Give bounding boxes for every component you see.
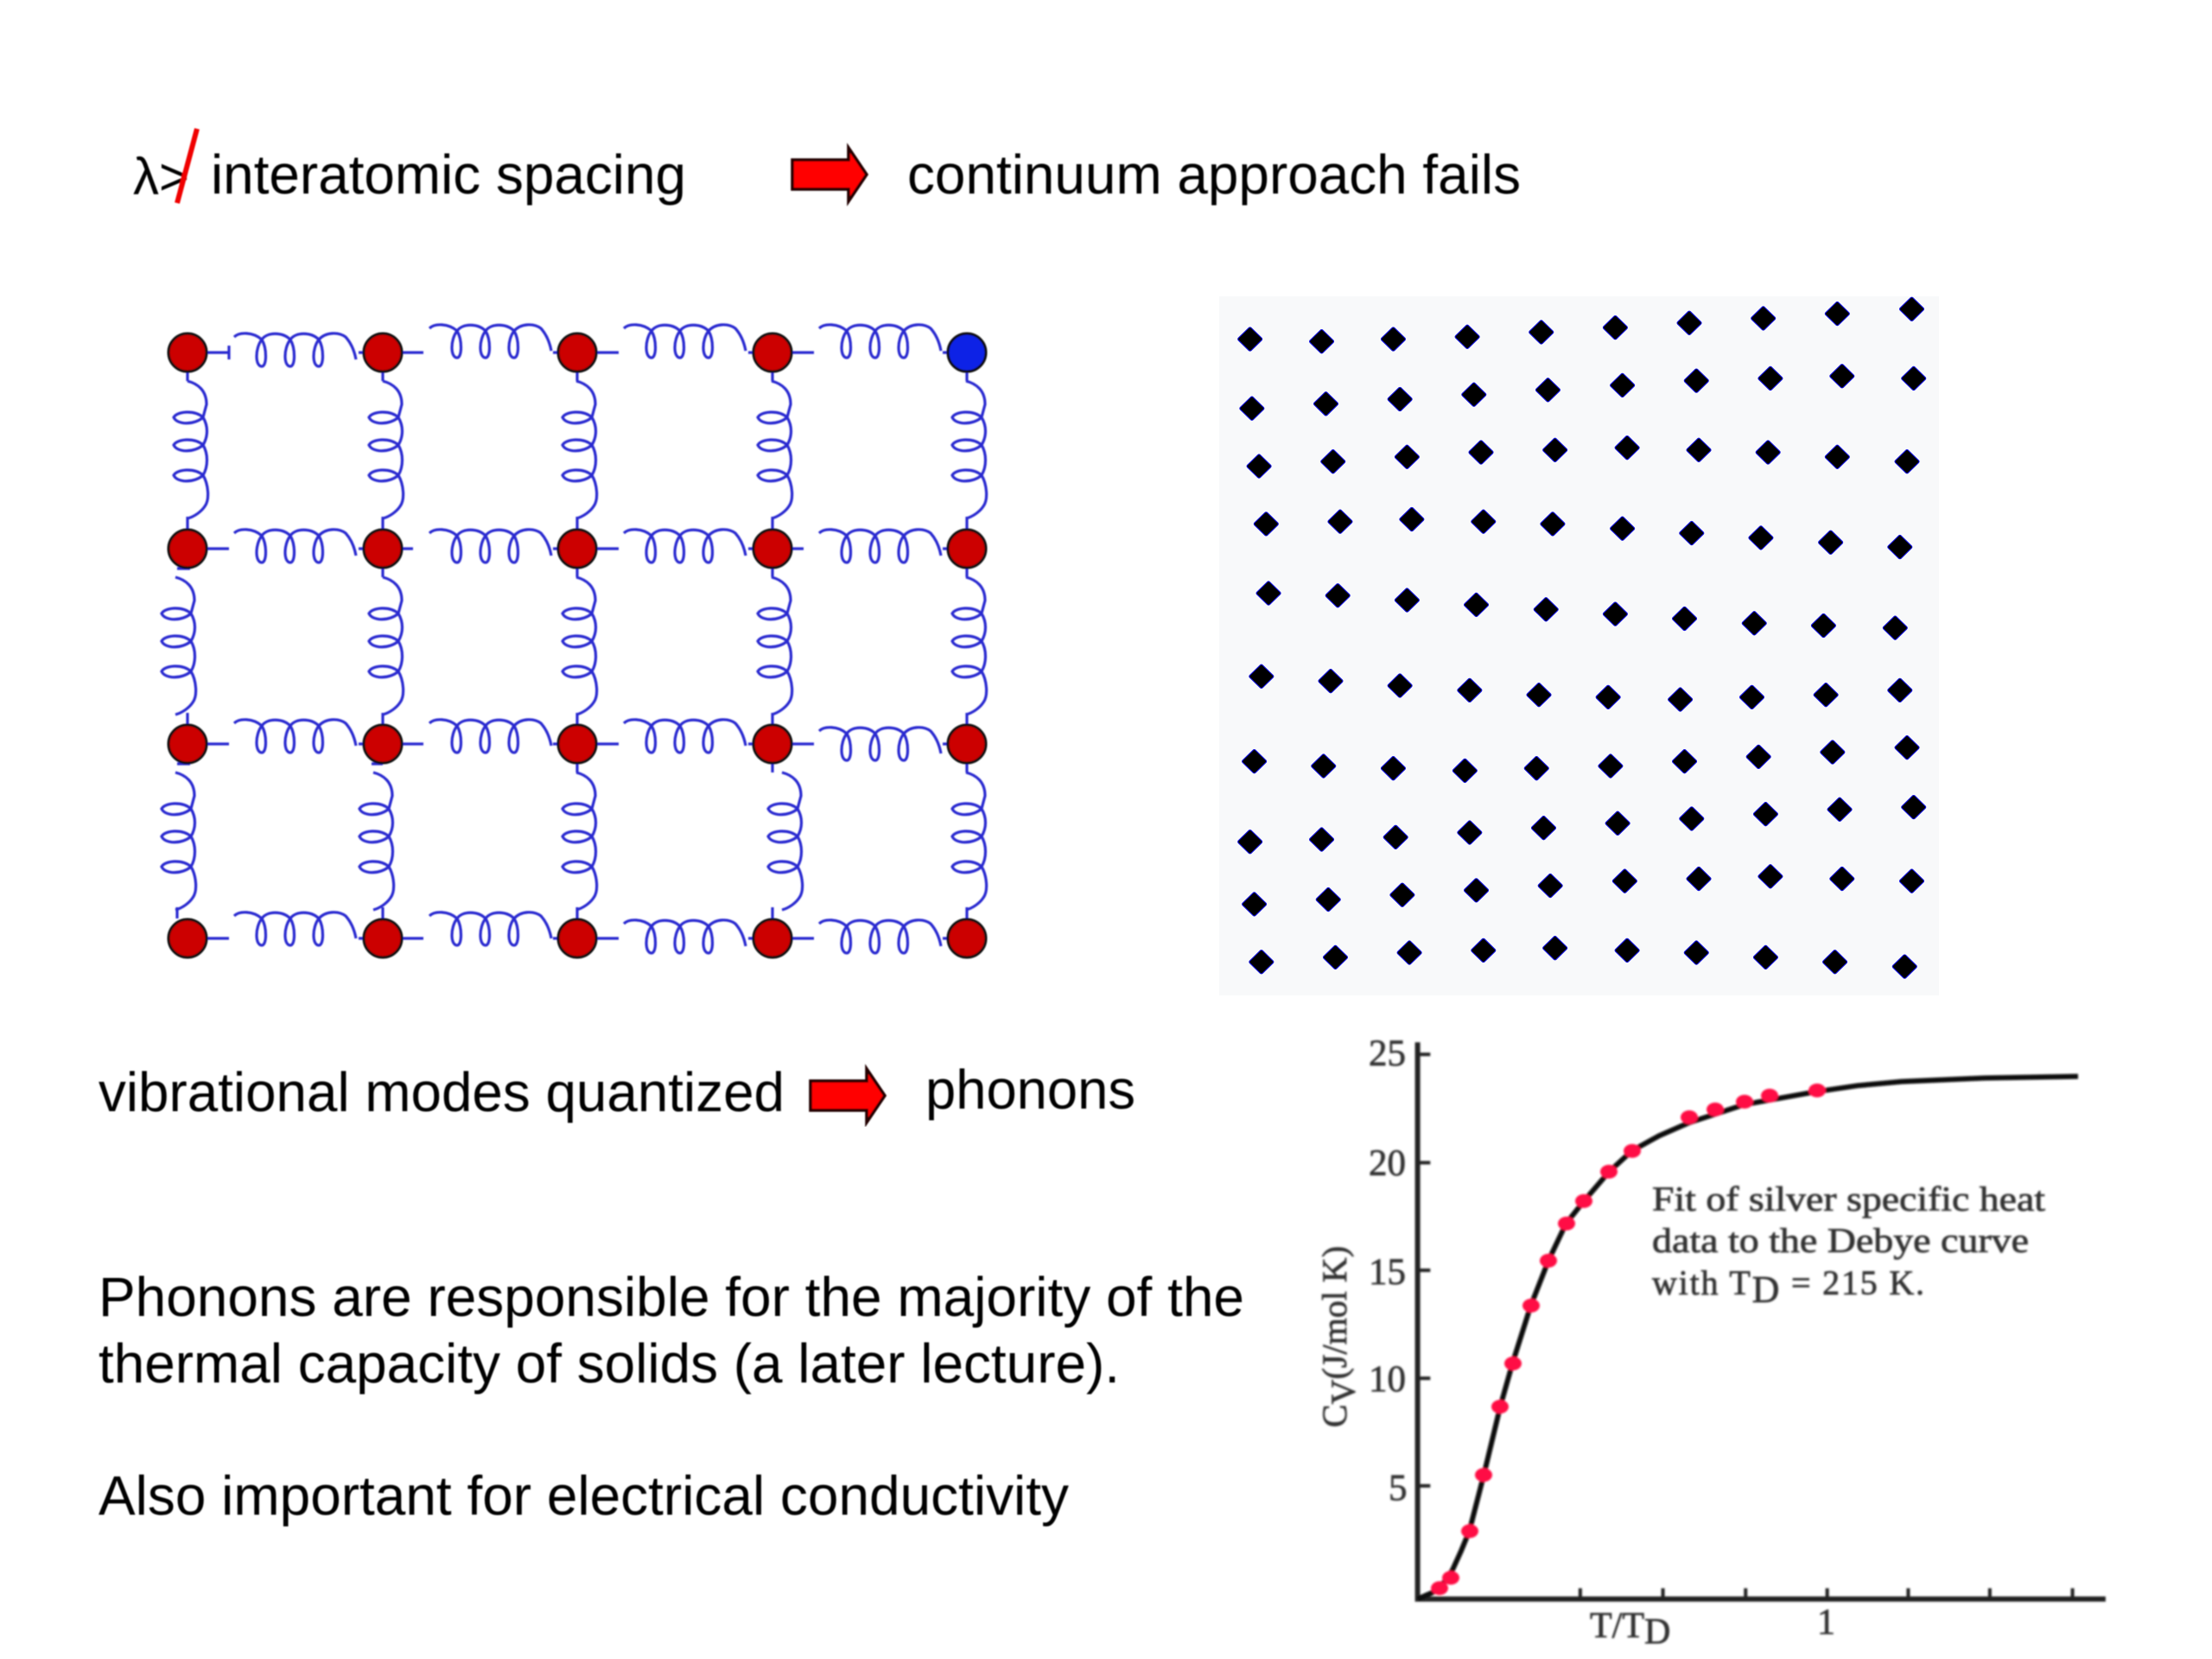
blue atom: [948, 334, 986, 372]
arrow: to continuum failure: [792, 148, 867, 201]
annotation: silver fit: data to the Debye curve: [1652, 1221, 2029, 1260]
chart: Debye specific heat curve: [1315, 1033, 2106, 1652]
text block: thermal capacity: [99, 1266, 1244, 1395]
arrow: to phonons: [810, 1069, 885, 1122]
y axis label: C: [1315, 1404, 1354, 1427]
text: interatomic spacing: interatomic spacing: [211, 143, 686, 206]
text: vibrational modes quantized: vibrational modes quantized: [99, 1061, 785, 1123]
annotation: silver fit: = 215 K.: [1781, 1263, 1926, 1302]
annotation: silver fit: D: [1752, 1268, 1781, 1311]
annotation: silver fit: Fit of silver specific heat: [1652, 1179, 2045, 1218]
text block: thermal capacity: Phonons are responsible for the majority of the: [99, 1266, 1244, 1328]
red atoms: [168, 334, 986, 957]
panel: displaced lattice of dots: [1219, 296, 1939, 995]
text: continuum approach fails: continuum approach fails: [907, 143, 1521, 206]
x axis value: 1: [1817, 1603, 1835, 1643]
spring connections: [162, 325, 987, 953]
silver data points: [1431, 1084, 1826, 1595]
statement: vibrational modes quantized to phonons: [99, 1058, 1135, 1123]
diagram: atoms connected by springs: [162, 325, 987, 957]
text block: electrical conductivity: Also important for electrical conductivity: [99, 1465, 1069, 1527]
y axis tick labels: 15: [1369, 1252, 1406, 1293]
heading line: wavelength versus interatomic spacing: [133, 129, 1521, 206]
red strike-through: [177, 129, 197, 203]
y axis label: V: [1324, 1379, 1363, 1404]
lattice dots: [1240, 299, 1924, 976]
panel background: [1219, 296, 1939, 995]
annotation: silver fit: [1652, 1179, 2045, 1311]
y axis tick labels: 20: [1369, 1143, 1406, 1184]
x axis label: T/T: [1590, 1606, 1644, 1646]
text block: thermal capacity: thermal capacity of solids (a later lecture).: [99, 1332, 1120, 1395]
y axis tick labels: 10: [1369, 1359, 1406, 1400]
chart axes and ticks: [1418, 1042, 2106, 1599]
Debye fit curve: [1418, 1077, 2078, 1599]
y axis label: (J/mol K): [1315, 1246, 1354, 1379]
y axis tick labels: 25: [1369, 1033, 1406, 1074]
y axis tick labels: 5: [1389, 1468, 1407, 1509]
wavelength comparison symbol: λ>: [133, 148, 189, 206]
text: phonons: phonons: [925, 1058, 1135, 1121]
annotation: silver fit: with T: [1652, 1263, 1752, 1302]
y axis tick labels: [1369, 1033, 1407, 1509]
x axis label: D: [1644, 1612, 1670, 1652]
